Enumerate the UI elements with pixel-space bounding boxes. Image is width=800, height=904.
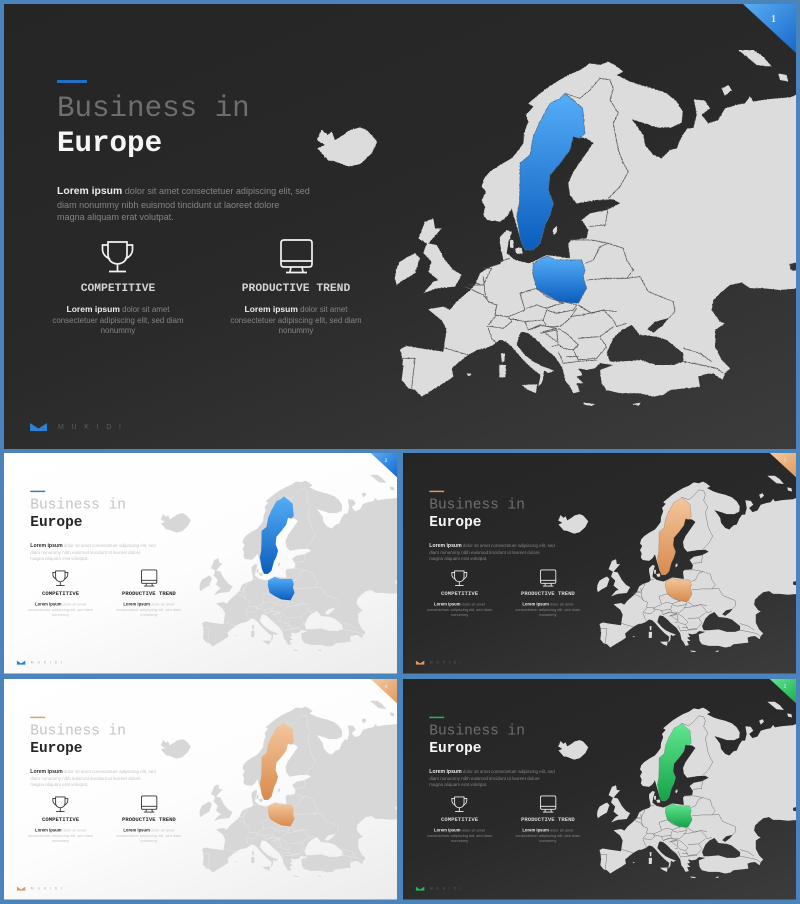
logo mark: [30, 423, 47, 431]
text: competitive: [427, 602, 492, 617]
intro paragraph: [57, 186, 310, 222]
icon: monitor: [540, 796, 556, 812]
text: productive trend: consectetuer adipiscing elit, sed diam: [515, 833, 580, 837]
corner fold: [370, 679, 397, 704]
title line 1: Business in: [30, 497, 126, 513]
text: competitive: Lorem ipsum dolor sit amet: [434, 827, 485, 832]
text: competitive: nonummy: [52, 613, 69, 617]
text: competitive: Lorem ipsum dolor sit amet: [434, 602, 485, 607]
intro paragraph: Lorem ipsum dolor sit amet consectetuer adipiscing elit, sed: [30, 543, 156, 549]
logo mark: [16, 886, 26, 891]
intro paragraph: magna aliquam erat volutpat.: [429, 556, 487, 561]
text: competitive: nonummy: [451, 838, 468, 843]
intro paragraph: [30, 543, 156, 561]
text: productive trend: consectetuer adipiscing elit, sed diam: [230, 316, 362, 324]
title line 2: Europe: [30, 514, 82, 531]
title line 2: Europe: [30, 740, 82, 756]
intro paragraph: magna aliquam erat volutpat.: [30, 782, 88, 787]
text: competitive: [52, 304, 184, 335]
intro paragraph: magna aliquam erat volutpat.: [57, 212, 174, 222]
title line 2: Europe: [57, 127, 162, 160]
intro paragraph: diam nonummy nibh euismod tincidunt ut laoreet dolore: [30, 776, 141, 781]
heading: competitive: COMPETITIVE: [441, 817, 478, 823]
icon: monitor: [141, 796, 158, 812]
slide 3: dark orange: [403, 453, 796, 674]
heading: competitive: COMPETITIVE: [81, 283, 155, 295]
heading: competitive: COMPETITIVE: [42, 817, 79, 823]
text: productive trend: consectetuer adipiscing elit, sed diam: [515, 608, 580, 612]
text: competitive: Lorem ipsum dolor sit amet: [35, 602, 86, 607]
map of Europe: [317, 50, 796, 406]
text: productive trend: Lorem ipsum dolor sit amet: [123, 602, 174, 607]
intro paragraph: [429, 543, 555, 561]
title line 1: Business in: [57, 92, 250, 125]
icon: monitor: [540, 570, 556, 586]
heading: productive trend: PRODUCTIVE TREND: [521, 592, 575, 597]
slide 2: light blue: [4, 453, 397, 674]
text: competitive: consectetuer adipiscing elit, sed diam: [28, 833, 93, 837]
text: productive trend: nonummy: [539, 838, 556, 843]
accent rule: [429, 716, 444, 718]
icon: trophy: [52, 570, 68, 586]
icon: trophy: [102, 241, 134, 272]
logo text: MUKIDI: [58, 424, 129, 431]
heading: productive trend: PRODUCTIVE TREND: [122, 592, 176, 597]
title line 2: Europe: [429, 514, 481, 531]
text: productive trend: [230, 304, 362, 335]
text: productive trend: nonummy: [279, 326, 313, 335]
intro paragraph: diam nonummy nibh euismod tincidunt ut laoreet dolore: [30, 550, 141, 555]
text: productive trend: Lorem ipsum dolor sit amet: [522, 602, 573, 607]
slide 4: light orange: [4, 679, 397, 899]
page number: 1: [771, 14, 776, 25]
text: competitive: Lorem ipsum dolor sit amet: [67, 304, 169, 314]
text: productive trend: nonummy: [140, 613, 157, 617]
intro paragraph: Lorem ipsum dolor sit amet consectetuer adipiscing elit, sed: [429, 769, 555, 774]
intro paragraph: magna aliquam erat volutpat.: [429, 782, 487, 787]
title line 1: Business in: [30, 722, 126, 739]
text: productive trend: nonummy: [539, 613, 556, 617]
text: competitive: nonummy: [101, 326, 135, 335]
text: productive trend: consectetuer adipiscing elit, sed diam: [116, 833, 181, 837]
text: competitive: [28, 602, 93, 617]
accent rule: [57, 80, 87, 82]
logo text: MUKIDI: [430, 661, 465, 665]
logo mark: [16, 660, 26, 665]
text: productive trend: [515, 602, 580, 617]
text: productive trend: Lorem ipsum dolor sit amet: [123, 827, 174, 832]
text: competitive: consectetuer adipiscing elit, sed diam: [427, 608, 492, 612]
map of Europe: [160, 700, 397, 877]
accent rule: [30, 716, 45, 718]
corner fold: [770, 679, 796, 704]
heading: competitive: COMPETITIVE: [42, 592, 79, 597]
icon: trophy: [451, 570, 468, 586]
icon: trophy: [52, 796, 68, 812]
logo text: MUKIDI: [31, 661, 66, 665]
text: competitive: nonummy: [451, 613, 468, 617]
text: competitive: consectetuer adipiscing elit, sed diam: [28, 608, 93, 612]
page number: 4: [385, 684, 387, 689]
heading: productive trend: PRODUCTIVE TREND: [521, 817, 575, 823]
page number: 3: [783, 458, 786, 464]
title line 1: Business in: [429, 722, 525, 739]
text: competitive: nonummy: [52, 838, 69, 843]
logo text: MUKIDI: [430, 887, 465, 890]
intro paragraph: [30, 769, 156, 787]
title line 2: Europe: [429, 740, 481, 756]
text: competitive: Lorem ipsum dolor sit amet: [35, 827, 86, 832]
text: productive trend: [116, 602, 182, 617]
slide 5: dark green: [403, 679, 796, 899]
text: competitive: consectetuer adipiscing elit, sed diam: [427, 833, 492, 837]
intro paragraph: Lorem ipsum dolor sit amet consectetuer adipiscing elit, sed: [57, 186, 310, 197]
heading: productive trend: PRODUCTIVE TREND: [242, 283, 350, 295]
logo text: MUKIDI: [31, 887, 66, 890]
slide 1: main dark blue: [4, 4, 796, 449]
corner fold: [743, 4, 796, 53]
logo mark: [416, 660, 424, 665]
text: productive trend: Lorem ipsum dolor sit amet: [245, 304, 347, 314]
map of Europe: [558, 702, 796, 878]
text: productive trend: consectetuer adipiscing elit, sed diam: [116, 608, 181, 612]
page number: 2: [385, 458, 387, 464]
text: competitive: consectetuer adipiscing elit, sed diam: [52, 316, 184, 324]
text: competitive: [28, 827, 93, 843]
intro paragraph: diam nonummy nibh euismod tincidunt ut laoreet dolore: [429, 776, 539, 781]
text: competitive: [427, 827, 492, 843]
accent rule: [429, 491, 444, 492]
intro paragraph: magna aliquam erat volutpat.: [30, 556, 88, 561]
heading: competitive: COMPETITIVE: [441, 592, 478, 597]
intro paragraph: Lorem ipsum dolor sit amet consectetuer adipiscing elit, sed: [30, 769, 156, 774]
heading: productive trend: PRODUCTIVE TREND: [122, 817, 176, 823]
text: productive trend: Lorem ipsum dolor sit amet: [522, 827, 573, 832]
title line 1: Business in: [429, 497, 525, 513]
text: productive trend: [515, 827, 580, 843]
intro paragraph: diam nonummy nibh euismod tincidunt ut laoreet dolore: [429, 550, 539, 555]
icon: monitor: [280, 239, 313, 274]
intro paragraph: Lorem ipsum dolor sit amet consectetuer adipiscing elit, sed: [429, 543, 555, 549]
icon: monitor: [141, 570, 158, 586]
corner fold: [370, 453, 397, 478]
logo mark: [416, 886, 424, 891]
corner fold: [770, 453, 796, 478]
text: productive trend: nonummy: [140, 838, 157, 843]
text: productive trend: [116, 827, 182, 843]
icon: trophy: [451, 796, 468, 812]
accent rule: [30, 491, 45, 492]
page number: 5: [783, 684, 786, 689]
map of Europe: [160, 474, 397, 651]
map of Europe: [558, 476, 796, 652]
intro paragraph: diam nonummy nibh euismod tincidunt ut laoreet dolore: [57, 200, 279, 210]
intro paragraph: [429, 769, 555, 787]
